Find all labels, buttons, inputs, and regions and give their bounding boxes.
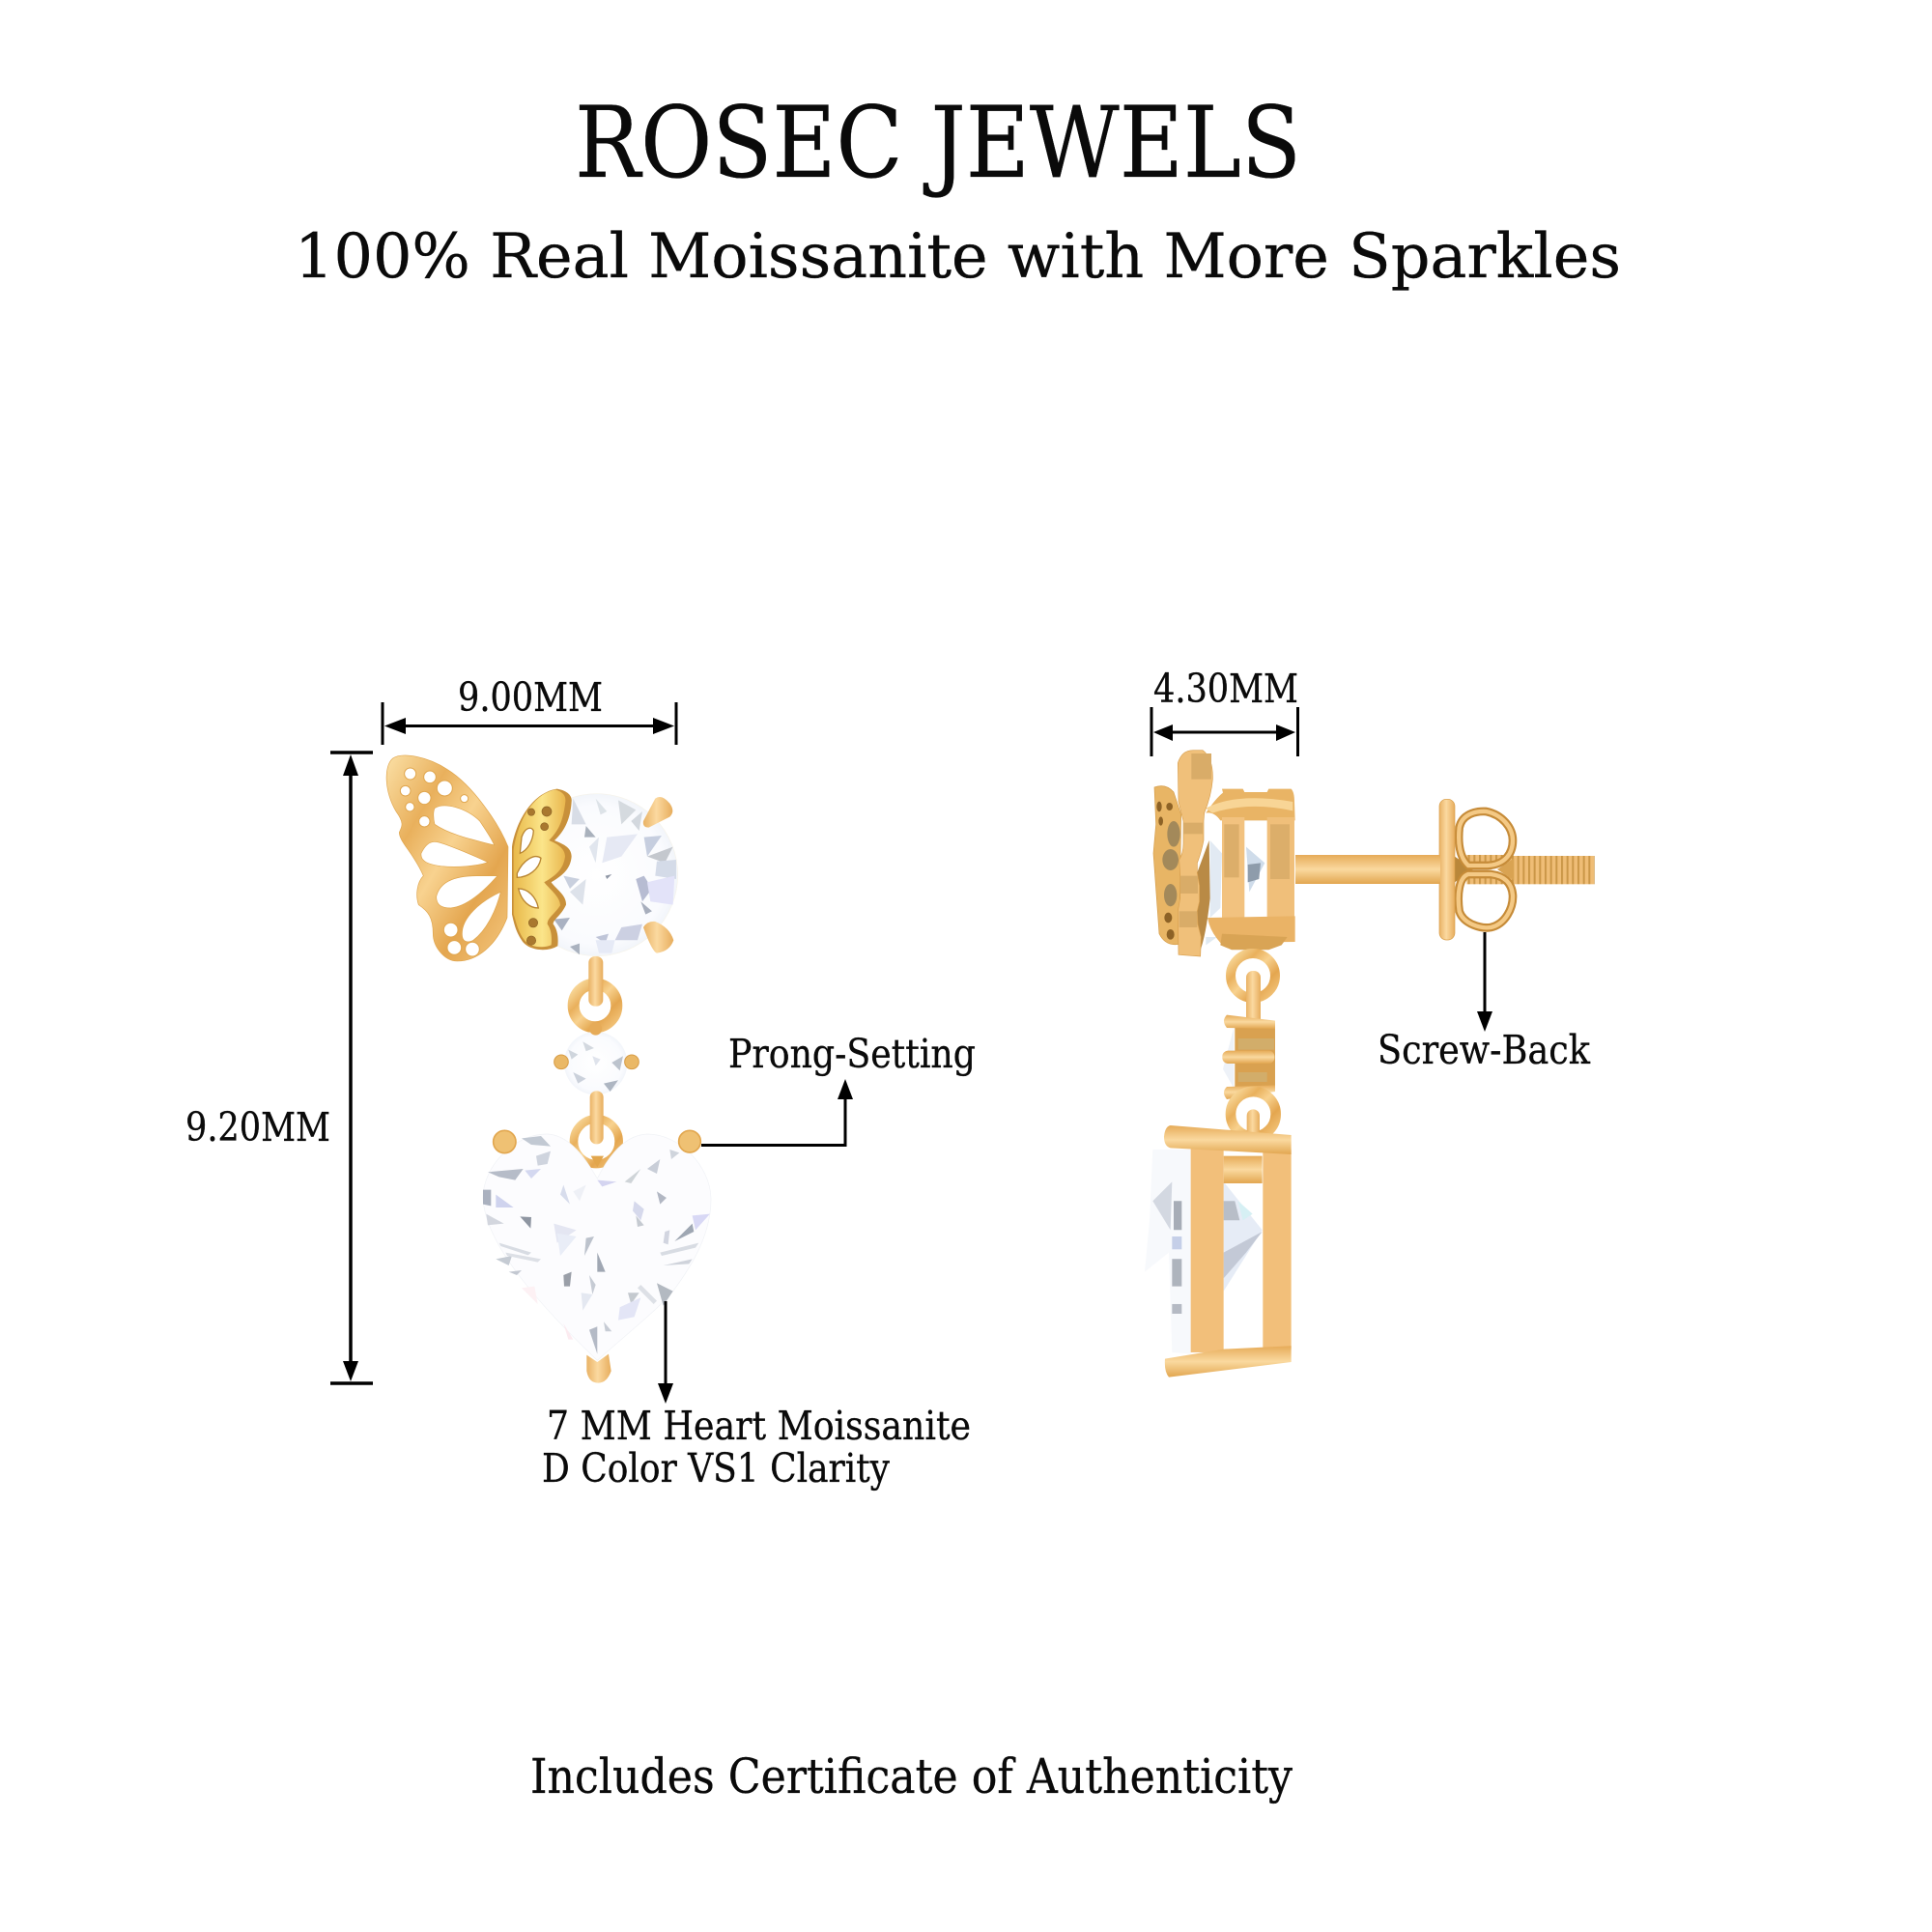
inner wedge <box>1197 840 1210 952</box>
side stone <box>1205 819 1267 945</box>
post <box>1295 855 1440 884</box>
upper connector <box>1246 971 1261 1034</box>
body lights <box>1238 1038 1274 1082</box>
heart setting side <box>1145 1125 1292 1378</box>
height dimension 9.20MM <box>185 753 373 1383</box>
heart link <box>574 1119 619 1167</box>
label 4.30MM: 4.30MM <box>1153 666 1298 712</box>
label heart line one: 7 MM Heart Moissanite <box>547 1403 971 1449</box>
wing details <box>1156 802 1180 940</box>
link bar <box>590 1091 604 1144</box>
label 9.20MM: 9.20MM <box>185 1104 330 1151</box>
certificate note: Includes Certificate of Authenticity <box>530 1748 1293 1804</box>
small accent stone <box>554 1022 639 1094</box>
accent stone setting <box>1222 1015 1276 1137</box>
jump link <box>574 956 616 1027</box>
heart setting rails <box>1164 1125 1292 1378</box>
accent prongs <box>1222 1015 1275 1099</box>
round moissanite stone <box>516 794 678 956</box>
width dimension 9.00MM <box>383 674 676 745</box>
screw-back callout <box>1378 932 1591 1073</box>
back plate <box>1439 799 1455 940</box>
label heart line two: D Color VS1 Clarity <box>542 1445 891 1492</box>
left butterfly wing <box>386 755 508 961</box>
front view earring <box>386 755 711 1383</box>
side view earring <box>1145 751 1595 1378</box>
title: ROSEC JEWELS <box>575 86 1301 201</box>
right bar <box>1267 817 1294 922</box>
subtitle: 100% Real Moissanite with More Sparkles <box>295 221 1621 293</box>
butterfly and round stone <box>386 755 678 1094</box>
heart moissanite callout <box>547 1301 971 1449</box>
right butterfly wing <box>512 789 572 950</box>
front wing shades <box>1179 753 1211 927</box>
top collar <box>1206 789 1295 820</box>
width dimension 4.30MM <box>1151 666 1298 756</box>
front wing edge <box>1178 751 1212 956</box>
heart moissanite <box>483 1134 711 1360</box>
screw back loops <box>1459 811 1513 927</box>
basket setting and butterfly side <box>1153 751 1295 956</box>
heart stone assembly <box>483 1091 711 1383</box>
accent stone body <box>1235 1022 1275 1090</box>
right bar shade <box>1270 824 1290 879</box>
prong-setting callout <box>701 1031 976 1146</box>
bottom collar <box>1208 916 1295 943</box>
lower jump ring <box>1231 1092 1276 1137</box>
prong bottom right <box>643 922 673 953</box>
label prong-setting: Prong-Setting <box>728 1031 976 1077</box>
knot <box>1220 934 1288 950</box>
left bar <box>1222 817 1244 922</box>
upper jump ring <box>1231 953 1275 998</box>
collar highlight <box>1206 798 1293 813</box>
screw back and post <box>1439 799 1595 940</box>
heart prongs <box>494 1130 700 1383</box>
back wing <box>1153 786 1181 945</box>
thread <box>1455 855 1595 884</box>
side accent stone <box>1223 1027 1234 1089</box>
left bar shade <box>1224 824 1239 877</box>
lower connector <box>1247 1109 1260 1137</box>
prong top right <box>643 797 672 828</box>
heart stone side <box>1145 1150 1263 1354</box>
label 9.00MM: 9.00MM <box>458 674 603 721</box>
label screw-back: Screw-Back <box>1378 1027 1591 1073</box>
